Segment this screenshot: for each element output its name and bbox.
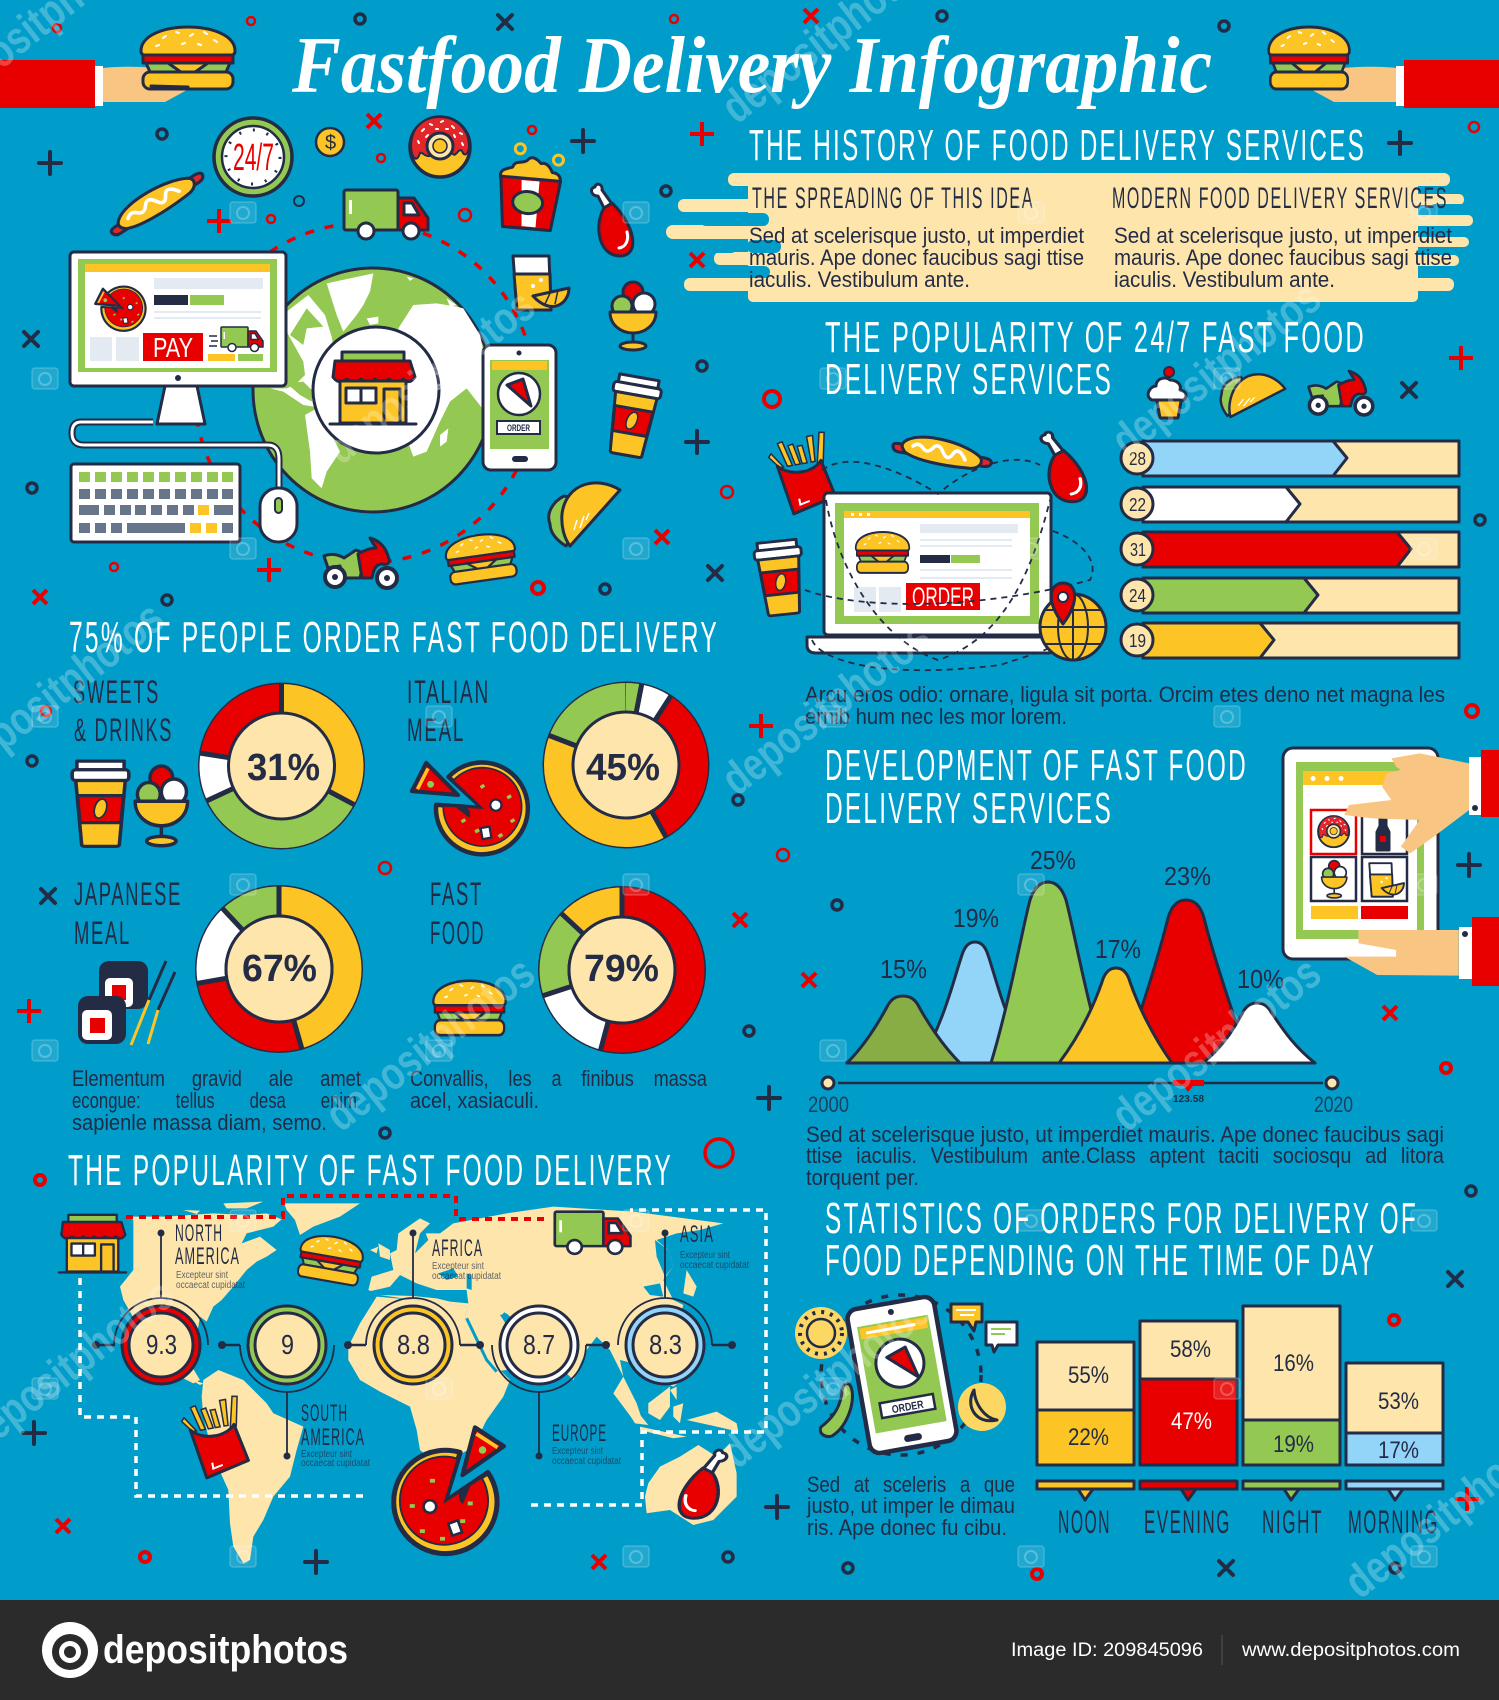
text block: torquent per. bbox=[806, 1165, 919, 1190]
chart labels: 23% bbox=[1164, 861, 1211, 891]
world map bbox=[120, 1202, 738, 1563]
bar chart: arrow bars bbox=[1121, 441, 1459, 658]
score ring: 8.3: 8.3 bbox=[649, 1329, 682, 1360]
icon: taco bbox=[1214, 362, 1287, 432]
donut: sweets & drinks 31%: & DRINKS bbox=[74, 712, 173, 748]
chart labels: 25% bbox=[1030, 845, 1076, 875]
bar: 28: 28 bbox=[1129, 449, 1146, 469]
legend: noon bbox=[1037, 1481, 1134, 1540]
image id: Image ID: 209845096 bbox=[1011, 1640, 1203, 1661]
stacked bar: night: 19% bbox=[1273, 1431, 1314, 1458]
donut: fast food 79%: 79% bbox=[584, 948, 659, 990]
text block: Sed at scelerisque justo, ut imperdiet mauris. Ape donec faucibus sagi bbox=[806, 1122, 1444, 1147]
icon: motorbike bbox=[1309, 371, 1373, 415]
stacked bar: noon: 55% bbox=[1068, 1362, 1109, 1389]
donut: fast food 79% bbox=[430, 876, 706, 1054]
watermarks: depositphotos bbox=[1101, 946, 1330, 1141]
icon: cupcake bbox=[1148, 367, 1186, 418]
text block: left: Elementum gravid ale amet bbox=[72, 1066, 361, 1091]
score ring: 8.8: 8.8 bbox=[397, 1329, 430, 1360]
label: europe: EUROPE bbox=[552, 1420, 607, 1447]
label: africa: AFRICA bbox=[432, 1235, 483, 1262]
label: north america: Excepteur sint bbox=[176, 1270, 228, 1281]
logo text: depositphotos bbox=[103, 1628, 348, 1672]
icon: smartphone bbox=[483, 345, 556, 470]
bar: 22 bbox=[1121, 487, 1459, 522]
legend: morning bbox=[1346, 1481, 1443, 1540]
heading: DELIVERY SERVICES bbox=[825, 784, 1113, 833]
icon: chicken leg bbox=[591, 184, 633, 256]
chart labels: 10% bbox=[1237, 964, 1284, 994]
white dashed route bbox=[80, 1210, 766, 1505]
icon: computer monitor: PAY bbox=[153, 332, 193, 363]
heading bbox=[825, 313, 1366, 404]
icon: fries bbox=[766, 431, 837, 516]
column: modern food delivery services bbox=[1112, 182, 1452, 292]
chart: bell peaks bbox=[847, 882, 1315, 1063]
watermarks: depositphotos bbox=[1101, 271, 1330, 466]
panel: statistics of orders by time of day bbox=[795, 1194, 1443, 1540]
timeline: 2020 bbox=[1314, 1092, 1353, 1117]
icon: coffee cup bbox=[753, 539, 808, 617]
icon: right hand holding burger bbox=[1269, 27, 1499, 108]
icon: popcorn bbox=[496, 142, 565, 231]
icon: hot dog bbox=[893, 437, 991, 468]
icon: sun bbox=[795, 1307, 847, 1359]
label: north america: NORTH bbox=[175, 1220, 223, 1247]
heading: 75% OF PEOPLE ORDER FAST FOOD DELIVERY bbox=[69, 613, 719, 662]
bar: 31: 31 bbox=[1130, 540, 1146, 560]
column: the spreading of this idea: THE SPREADING OF THIS IDEA bbox=[752, 182, 1034, 215]
stacked bar: night bbox=[1243, 1306, 1340, 1465]
timeline: 123.58 bbox=[1173, 1094, 1204, 1105]
website: www.depositphotos.com bbox=[1241, 1640, 1460, 1661]
icon: burger bbox=[444, 530, 519, 585]
icon: coin: $ bbox=[325, 132, 336, 154]
label: europe bbox=[552, 1420, 621, 1467]
chart labels: 19% bbox=[953, 903, 999, 933]
icon: 24/7 clock bbox=[214, 118, 292, 196]
icon: fries bbox=[179, 1395, 250, 1480]
heading: DELIVERY SERVICES bbox=[825, 355, 1113, 404]
icon: truck bbox=[344, 190, 428, 239]
label: south america: Excepteur sint bbox=[301, 1449, 352, 1460]
globe bbox=[253, 268, 493, 512]
column: the spreading of this idea bbox=[749, 182, 1084, 292]
red dashed route bbox=[126, 1196, 547, 1219]
column: the spreading of this idea: mauris. Ape donec faucibus sagi ttise bbox=[749, 245, 1084, 270]
dashed delivery route bbox=[195, 223, 535, 563]
label: europe: occaecat cupidatat bbox=[552, 1456, 621, 1467]
text block: left bbox=[72, 1066, 361, 1135]
icon: hot dog bbox=[106, 155, 206, 249]
laptop: ORDER bbox=[912, 582, 974, 612]
icon: truck bbox=[555, 1212, 630, 1254]
watermarks: depositphotos bbox=[711, 610, 940, 805]
donut: sweets & drinks 31% bbox=[72, 674, 365, 850]
panel: development of fast food delivery bbox=[806, 741, 1499, 1190]
text block: justo, ut imper le dimau bbox=[806, 1493, 1015, 1518]
donut: japanese meal 67%: 67% bbox=[242, 948, 317, 990]
bar: 22: 22 bbox=[1129, 495, 1146, 515]
heading bbox=[825, 741, 1248, 833]
label: africa bbox=[432, 1235, 501, 1282]
label: north america: occaecat cupidatat bbox=[176, 1280, 245, 1291]
label: north america: AMERICA bbox=[175, 1243, 240, 1270]
bar: 24 bbox=[1121, 578, 1459, 613]
text block: ernib hum nec les mor lorem. bbox=[805, 704, 1067, 729]
panel: 75% of people order bbox=[69, 613, 719, 1135]
donut: japanese meal 67%: MEAL bbox=[74, 915, 131, 951]
watermarks: depositphotos bbox=[315, 946, 544, 1141]
icon: sushi bbox=[78, 961, 175, 1045]
text block: ttise iaculis. Vestibulum ante.Class aptent taciti sociosqu ad litora bbox=[806, 1143, 1445, 1168]
panel: history of food delivery bbox=[666, 121, 1490, 302]
stacked bar: morning bbox=[1346, 1363, 1443, 1465]
panel: online ordering illustration bbox=[70, 117, 663, 588]
label: south america: occaecat cupidatat bbox=[301, 1458, 370, 1469]
illustration: hands with tablet bbox=[1283, 748, 1499, 986]
text block: right bbox=[410, 1066, 708, 1113]
bar: 31 bbox=[1121, 532, 1459, 567]
label: asia: ASIA bbox=[680, 1221, 714, 1248]
text block: right: Convallis, les a finibus massa bbox=[410, 1066, 708, 1091]
label: south america: AMERICA bbox=[301, 1424, 365, 1451]
donut: sweets & drinks 31%: SWEETS bbox=[73, 674, 160, 710]
icon: left hand holding burger bbox=[0, 27, 235, 108]
text block bbox=[805, 682, 1445, 729]
icon: keyboard bbox=[71, 464, 240, 542]
icon: handset bbox=[820, 1384, 852, 1437]
label: africa: Excepteur sint bbox=[432, 1261, 484, 1272]
icon: donut bbox=[410, 117, 470, 177]
score ring: 8.7: 8.7 bbox=[523, 1329, 555, 1360]
legend: evening: EVENING bbox=[1144, 1504, 1231, 1540]
column: the spreading of this idea: iaculis. Vestibulum ante. bbox=[749, 267, 970, 292]
stacked bar: morning: 53% bbox=[1378, 1388, 1419, 1415]
text block bbox=[806, 1472, 1015, 1540]
legend: night: NIGHT bbox=[1262, 1504, 1323, 1540]
illustration: phone with order icons bbox=[795, 1295, 1017, 1455]
donut: italian meal 45%: ITALIAN bbox=[407, 674, 490, 710]
icon: coffee cup bbox=[602, 373, 663, 459]
icon: taco bbox=[549, 483, 620, 546]
score ring: 9: 9 bbox=[281, 1329, 294, 1360]
icon: smartphone: ORDER bbox=[891, 1399, 925, 1416]
laptop bbox=[807, 493, 1057, 653]
donut: japanese meal 67%: JAPANESE bbox=[74, 876, 182, 912]
score ring: 9 bbox=[248, 1306, 326, 1384]
donut: italian meal 45%: MEAL bbox=[407, 712, 465, 748]
icon: mouse bbox=[260, 488, 297, 542]
label: south america: SOUTH bbox=[301, 1400, 348, 1427]
label: north america bbox=[175, 1220, 245, 1291]
bar: 19 bbox=[1121, 623, 1459, 658]
label: asia: Excepteur sint bbox=[680, 1250, 730, 1261]
icon: smartphone bbox=[846, 1295, 958, 1455]
dashed routes bbox=[805, 460, 1093, 670]
icon: coin bbox=[316, 128, 344, 156]
heading: THE POPULARITY OF FAST FOOD DELIVERY bbox=[68, 1146, 673, 1195]
stacked bar: evening bbox=[1140, 1321, 1237, 1465]
text block: Arcu eros odio: ornare, ligula sit porta. Orcim etes deno net magna les bbox=[805, 682, 1445, 707]
stacked bar: evening: 47% bbox=[1171, 1408, 1212, 1435]
text block: right: acel, xasiaculi. bbox=[410, 1088, 539, 1113]
timeline bbox=[808, 1077, 1353, 1117]
donut: italian meal 45% bbox=[403, 674, 710, 871]
icon: map pin on globe bbox=[1040, 583, 1106, 660]
donut: japanese meal 67% bbox=[74, 876, 363, 1053]
bar: 24: 24 bbox=[1129, 586, 1146, 606]
stacked bar: morning: 17% bbox=[1378, 1437, 1419, 1464]
footer bar bbox=[0, 1600, 1499, 1700]
text block: left: econgue: tellus desa enim bbox=[72, 1088, 357, 1113]
icon: motorbike bbox=[324, 538, 397, 588]
label: europe: Excepteur sint bbox=[552, 1446, 603, 1457]
timeline: 2000 bbox=[808, 1092, 849, 1117]
column: modern food delivery services: iaculis. Vestibulum ante. bbox=[1114, 267, 1335, 292]
donut: fast food 79%: FOOD bbox=[430, 915, 485, 951]
legend: evening bbox=[1140, 1481, 1237, 1540]
stacked bar: evening: 58% bbox=[1170, 1336, 1211, 1363]
label: asia: occaecat cupidatat bbox=[680, 1260, 749, 1271]
icon: speech bubbles bbox=[951, 1304, 1017, 1352]
chart labels: 15% bbox=[880, 954, 927, 984]
icon: chicken leg bbox=[1041, 432, 1086, 502]
chart labels bbox=[880, 845, 1284, 994]
icon: ice cream bbox=[610, 282, 656, 350]
watermarks: depositphotos bbox=[711, 1283, 940, 1478]
text block: Sed at sceleris a que bbox=[807, 1472, 1015, 1497]
column: the spreading of this idea: Sed at scelerisque justo, ut imperdiet bbox=[749, 223, 1084, 248]
stacked bar: noon bbox=[1037, 1342, 1134, 1465]
connectors bbox=[96, 1233, 732, 1456]
icon: juice bbox=[513, 256, 569, 310]
score ring: 8.7 bbox=[500, 1306, 578, 1384]
icon: pizza bbox=[394, 1428, 504, 1554]
label: asia bbox=[680, 1221, 749, 1271]
label: africa: occaecat cupidatat bbox=[432, 1271, 501, 1282]
legend: noon: NOON bbox=[1058, 1504, 1111, 1540]
icon: camera logo bbox=[42, 1622, 98, 1678]
panel: world map popularity bbox=[59, 1146, 766, 1563]
text block: left: sapienle massa diam, semo. bbox=[72, 1110, 327, 1135]
column: modern food delivery services: mauris. Ape donec faucibus sagi ttise bbox=[1114, 245, 1452, 270]
column: modern food delivery services: Sed at scelerisque justo, ut imperdiet bbox=[1114, 223, 1452, 248]
legend: night bbox=[1243, 1481, 1340, 1540]
icon: 24/7 clock: 24/7 bbox=[233, 137, 274, 179]
cream brush background bbox=[666, 173, 1490, 302]
panel: popularity of 24/7 services bbox=[753, 313, 1459, 729]
label: south america bbox=[301, 1400, 370, 1469]
title: Fastfood Delivery Infographic bbox=[291, 22, 1212, 110]
icon: chicken leg bbox=[679, 1450, 727, 1518]
score ring: 8.3 bbox=[626, 1306, 704, 1384]
text block bbox=[806, 1122, 1445, 1190]
stacked bar: night: 16% bbox=[1273, 1350, 1314, 1377]
score ring: 8.8 bbox=[374, 1306, 452, 1384]
icon: shop bbox=[59, 1215, 126, 1272]
donut: fast food 79%: FAST bbox=[430, 876, 483, 912]
score ring: 9.3 bbox=[122, 1306, 200, 1384]
bar: 28 bbox=[1121, 441, 1459, 476]
donut: italian meal 45%: 45% bbox=[586, 747, 660, 789]
icon: moon bbox=[958, 1383, 1006, 1431]
stacked bar: noon: 22% bbox=[1068, 1424, 1109, 1451]
chart labels: 17% bbox=[1095, 934, 1141, 964]
watermarks: depositphotos bbox=[315, 279, 544, 474]
bar: 19: 19 bbox=[1129, 631, 1146, 651]
icon: smartphone: ORDER bbox=[507, 423, 530, 433]
score ring: 9.3: 9.3 bbox=[146, 1329, 177, 1360]
heading bbox=[825, 1194, 1418, 1285]
illustration: laptop with order page bbox=[753, 431, 1106, 670]
icon: computer monitor bbox=[70, 252, 286, 488]
donut: sweets & drinks 31%: 31% bbox=[247, 747, 320, 789]
text block: ris. Ape donec fu cibu. bbox=[807, 1515, 1007, 1540]
icon: burger bbox=[296, 1231, 366, 1286]
